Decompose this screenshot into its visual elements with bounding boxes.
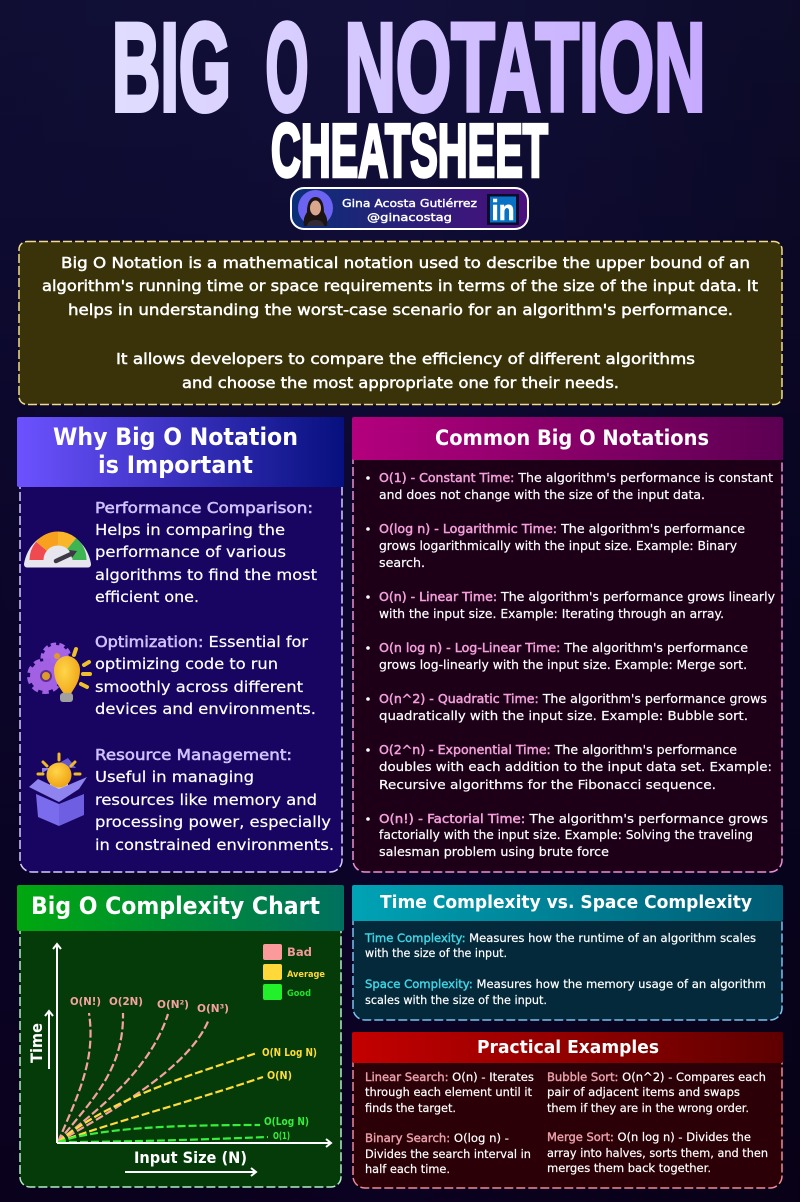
item: factorial time: O(n!) - Factorial Time: The algorithm's performance grows xyxy=(379,811,768,826)
item: constant time: and does not change with the size of the input data. xyxy=(379,487,705,502)
legend: Average xyxy=(287,970,325,980)
text: linear search: Linear Search: O(n) - Iterates xyxy=(365,1070,534,1084)
title: BIG xyxy=(112,0,231,138)
text: performance comparison: Performance Comparison: xyxy=(95,499,313,517)
text: resource management: Resource Management: xyxy=(95,746,292,764)
text: space complexity xyxy=(365,977,766,1007)
text: time complexity xyxy=(364,931,756,960)
heading: Big O Complexity Chart xyxy=(31,892,320,920)
legend: Good xyxy=(287,989,311,999)
curve labels: O(Log N) xyxy=(264,1115,309,1128)
text: optimization xyxy=(95,633,316,718)
text: merge sort: array into halves, sorts them, and then xyxy=(547,1146,768,1160)
panel: introduction: and choose the most appropriate one for their needs. xyxy=(182,374,619,392)
text: space complexity: Space Complexity: Measures how the memory usage of an algorithm xyxy=(365,977,766,991)
author badge xyxy=(291,188,528,229)
item: exponential time: doubles with each addition to the input data set. Example: xyxy=(379,759,772,774)
item: log-linear time: O(n log n) - Log-Linear Time: The algorithm's performance xyxy=(379,640,748,655)
item: quadratic time: quadratically with the input size. Example: Bubble sort. xyxy=(379,708,748,723)
text: time complexity: with the size of the input. xyxy=(365,946,507,960)
icon: linkedin: in xyxy=(492,195,514,227)
icon: gears and light bulb xyxy=(30,645,90,702)
item: quadratic time xyxy=(366,691,767,723)
panel: time vs space complexity xyxy=(352,885,783,1020)
heading xyxy=(352,1032,783,1063)
heading: Why Big O Notation xyxy=(53,423,298,451)
title: O xyxy=(266,0,308,138)
text: optimization: Optimization: Essential for xyxy=(95,633,309,651)
curve labels: O(2N) xyxy=(109,995,143,1008)
item: factorial time xyxy=(366,811,768,859)
item: log-linear time xyxy=(366,640,748,672)
heading xyxy=(17,885,344,931)
item: constant time: O(1) - Constant Time: The algorithm's performance is constant xyxy=(379,470,773,485)
icon: speedometer xyxy=(24,532,91,568)
heading: is Important xyxy=(98,451,253,479)
text: resource management: in constrained environments. xyxy=(95,836,334,854)
label: time: Time xyxy=(27,1023,46,1063)
title xyxy=(112,0,706,138)
text: bubble sort: them if they are in the wrong order. xyxy=(547,1101,749,1115)
chart xyxy=(27,944,331,1176)
heading: Time Complexity vs. Space Complexity xyxy=(380,892,752,913)
curve labels: O(N²) xyxy=(157,998,189,1011)
curves: average xyxy=(58,1053,263,1142)
axes xyxy=(53,944,331,1147)
item: linear time xyxy=(366,589,776,621)
item: linear time: O(n) - Linear Time: The algorithm's performance grows linearly xyxy=(379,589,776,604)
item: logarithmic time xyxy=(366,521,745,570)
icon: light bulb in box xyxy=(29,754,87,826)
curves: bad xyxy=(58,1013,209,1142)
panel: why big o notation is important xyxy=(17,417,344,872)
heading xyxy=(17,417,344,487)
text: merge sort: Merge Sort: O(n log n) - Divides the xyxy=(547,1130,751,1144)
label: input size: Input Size (N) xyxy=(134,1148,247,1167)
icon: author avatar xyxy=(298,190,333,226)
panel: introduction: helps in understanding the worst-case scenario for an algorithm's performance. xyxy=(68,301,733,319)
text: resource management xyxy=(95,746,334,854)
item: logarithmic time: search. xyxy=(379,555,425,570)
item: exponential time xyxy=(366,742,772,792)
panel: introduction: Big O Notation is a mathematical notation used to describe the upper bound of an xyxy=(61,254,750,272)
text: optimization: devices and environments. xyxy=(95,700,316,718)
text: optimization: optimizing code to run xyxy=(95,655,278,673)
heading: Common Big O Notations xyxy=(435,426,709,450)
text: binary search: Binary Search: O(log n) - xyxy=(365,1131,509,1145)
item: factorial time: factorially with the input size. Example: Solving the traveling xyxy=(379,827,753,842)
arrow: time xyxy=(45,1011,53,1069)
curves: good xyxy=(58,1125,268,1142)
item: quadratic time: O(n^2) - Quadratic Time: The algorithm's performance grows xyxy=(379,691,767,706)
item: logarithmic time: O(log n) - Logarithmic Time: The algorithm's performance xyxy=(379,521,745,536)
panel: introduction: It allows developers to compare the efficiency of different algorithms xyxy=(116,350,695,368)
subtitle: CHEATSHEET xyxy=(271,108,548,192)
arrow: input size xyxy=(125,1168,256,1176)
item: linear time: with the input size. Example: Iterating through an array. xyxy=(379,606,724,621)
text: linear search: through each element until it xyxy=(365,1085,532,1099)
curve labels: O(N) xyxy=(267,1069,292,1082)
panel: practical examples xyxy=(352,1032,783,1188)
curve labels: O(N³) xyxy=(197,1002,229,1015)
panel: common big o notations xyxy=(352,417,783,872)
text: resource management: processing power, especially xyxy=(95,813,331,831)
text: linear search: finds the target. xyxy=(365,1101,456,1115)
curve labels: O(N Log N) xyxy=(262,1046,317,1059)
text: resource management: Useful in managing xyxy=(95,768,254,786)
text: bubble sort: Bubble Sort: O(n^2) - Compares each xyxy=(547,1070,766,1084)
text: bubble sort xyxy=(547,1070,766,1115)
text: performance comparison: efficient one. xyxy=(95,588,199,606)
text: optimization: smoothly across different xyxy=(95,678,303,696)
text: binary search: Divides the search interval in xyxy=(365,1147,531,1161)
text: time complexity: Time Complexity: Measures how the runtime of an algorithm scales xyxy=(364,931,756,945)
text: performance comparison: Helps in comparing the xyxy=(95,521,285,539)
text: space complexity: scales with the size of the input. xyxy=(365,993,547,1007)
item: factorial time: salesman problem using brute force xyxy=(379,844,609,859)
text: binary search xyxy=(365,1131,531,1176)
item: exponential time: O(2^n) - Exponential Time: The algorithm's performance xyxy=(379,742,737,757)
text: merge sort xyxy=(547,1130,768,1175)
item: constant time xyxy=(366,470,773,502)
panel: big o complexity chart xyxy=(17,885,344,1187)
panel: introduction xyxy=(19,242,782,404)
item: exponential time: Recursive algorithms for the Fibonacci sequence. xyxy=(379,777,716,792)
curve labels xyxy=(70,995,317,1142)
heading: Practical Examples xyxy=(477,1037,659,1058)
legend: Bad xyxy=(287,945,312,959)
heading xyxy=(352,885,783,921)
author badge: @ginacostag xyxy=(367,211,452,224)
item: log-linear time: grows log-linearly with the input size. Example: Merge sort. xyxy=(379,657,747,672)
text: merge sort: merges them back together. xyxy=(547,1161,711,1175)
text: performance comparison: algorithms to find the most xyxy=(95,566,317,584)
text: bubble sort: pair of adjacent items and swaps xyxy=(547,1085,740,1099)
curve labels: O(1) xyxy=(273,1131,290,1142)
text: resource management: resources like memory and xyxy=(95,791,317,809)
panel: introduction: algorithm's running time or space requirements in terms of the size of the input data. It xyxy=(42,277,758,295)
text: binary search: half each time. xyxy=(365,1162,450,1176)
text: performance comparison xyxy=(95,499,317,606)
text: performance comparison: performance of various xyxy=(95,543,286,561)
item: logarithmic time: grows logarithmically with the input size. Example: Binary xyxy=(379,538,738,553)
curve labels: O(N!) xyxy=(70,995,101,1008)
legend xyxy=(263,944,325,1000)
author badge: Gina Acosta Gutiérrez xyxy=(342,197,477,210)
heading xyxy=(352,417,783,460)
text: linear search xyxy=(365,1070,534,1115)
